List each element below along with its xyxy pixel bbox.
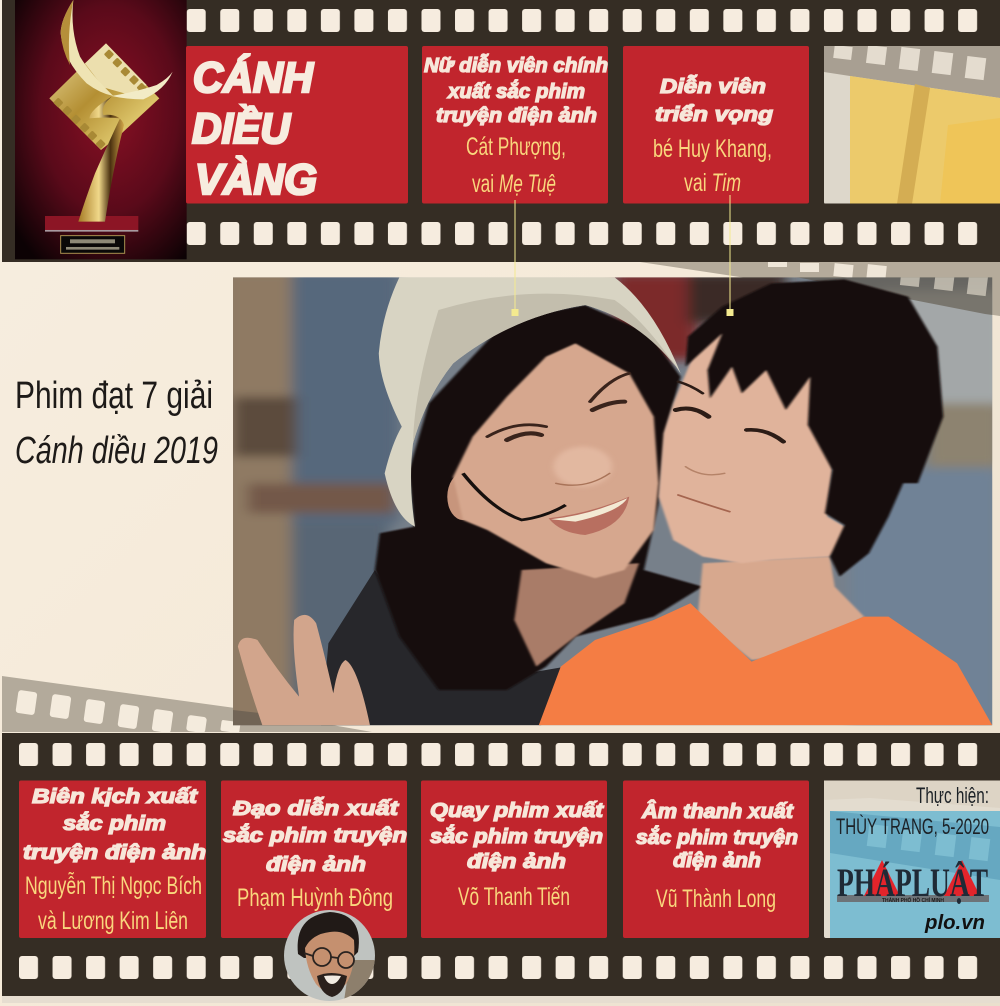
top sprocket holes upper row [186,9,978,32]
card: best actress: truyện điện ảnh [436,105,597,127]
woman face [453,343,659,578]
card: cinematography: Quay phim xuất [430,800,605,822]
shirt [539,603,992,725]
woman ear [447,473,479,520]
hair strand [463,473,566,520]
credits card [824,780,1000,938]
card: sound [623,780,809,938]
card: director: Phạm Huỳnh Đông [237,884,393,912]
card: best actress: Nữ diễn viên chính [424,54,608,77]
clothing [321,570,566,725]
card: sound: Vũ Thành Long [656,885,776,913]
director face [305,932,354,992]
card: director: điện ảnh [266,854,366,876]
card: screenplay [19,780,206,938]
heading: film with 7 awards [15,375,218,472]
card: promising actor: Diễn viên [660,75,766,98]
background block [344,960,375,1001]
card: cinematography: Võ Thanh Tiến [458,883,570,911]
card: screenplay: truyện điện ảnh [23,842,206,864]
top sprocket holes lower row [186,222,978,245]
card: sound: Âm thanh xuất [641,799,794,823]
card: Cánh Diều Vàng title: DIỀU [192,105,291,153]
footer band [2,996,1000,1003]
boy ear [842,475,891,525]
card: Cánh Diều Vàng title: VÀNG [195,156,317,204]
card: best actress [422,46,608,204]
card: promising actor: bé Huy Khang, [653,135,772,163]
card: best actress: xuất sắc phim [447,80,585,103]
card: Cánh Diều Vàng title: CÁNH [193,54,314,102]
card: director [221,780,407,938]
hand [238,615,370,725]
portrait: director [284,910,375,1001]
boy eyes and mouth [676,382,783,512]
trophy panel [15,0,187,259]
connector: boy marker [726,195,734,316]
bottom sprocket holes upper row [19,743,979,766]
hat [379,277,681,527]
top film strip [2,0,1000,262]
film overlay on photo [233,264,1000,726]
site url: plo.vn [924,912,985,934]
card: promising actor: triển vọng [655,104,773,126]
faded film strip: lower left [2,676,372,733]
woman neck [514,563,639,667]
card: promising actor [623,46,809,204]
card: cinematography: sắc phim truyện [430,825,603,848]
director beard and smile [317,973,347,997]
card: screenplay: và Lương Kim Liên [38,907,188,935]
card: cinematography: điện ảnh [467,851,566,873]
woman mouth [549,497,629,535]
card: cinematography [421,780,607,938]
card: sound: điện ảnh [673,850,761,872]
heading: film with 7 awards: Phim đạt 7 giải [15,375,213,417]
boy hair [686,279,943,577]
card: screenplay: Nguyễn Thị Ngọc Bích [25,871,202,900]
director hair [298,912,359,958]
boy neck [698,557,864,660]
main photo: actress and boy [223,264,1000,737]
woman hair [375,305,703,690]
decorative film frame: top right card [824,46,1000,204]
heading: film with 7 awards: Cánh diều 2019 [15,430,218,472]
card: screenplay: Biên kịch xuất [32,786,199,808]
bottom film strip [2,733,1000,996]
card: best actress: vai Mẹ Tuệ [472,170,556,198]
bottom sprocket holes lower row [19,956,979,979]
connector: actress marker [512,200,518,316]
card: best actress: Cát Phượng, [466,133,566,161]
trophy film diamond [49,43,159,150]
director glasses [304,948,354,968]
card: promising actor: vai Tim [684,169,741,197]
card: sound: sắc phim truyện [636,826,798,849]
card: director: sắc phim truyện [223,824,407,847]
faded film strip: upper right [640,262,1000,316]
card: screenplay: sắc phim [63,812,166,835]
trophy wings [112,72,173,99]
trophy base [45,216,138,230]
plaque [61,236,125,253]
woman eyes brows [487,373,629,485]
logo: Pháp Luật: THÀNH PHỐ HỒ CHÍ MINH [882,896,944,904]
trophy stem [78,97,124,222]
card: Cánh Diều Vàng title [186,46,408,204]
card: director: Đạo diễn xuất [233,797,400,820]
boy face [659,327,869,563]
